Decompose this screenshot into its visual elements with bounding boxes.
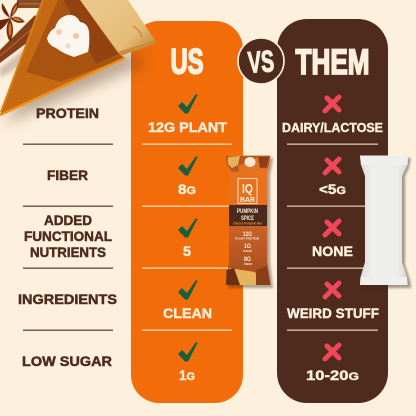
value: <5g: <5G (319, 182, 346, 197)
bar stats (235, 232, 259, 266)
icon: x (325, 345, 339, 359)
bar stats: 12G (243, 232, 252, 238)
badge: vs (238, 38, 284, 84)
illustration: pumpkin pie slice with spices (0, 0, 157, 124)
label: added functional nutrients: NUTRIENTS (30, 244, 106, 260)
heading: them: THEM (296, 43, 370, 82)
bar stats: 1G (244, 244, 251, 250)
flavour band (229, 205, 267, 226)
pie shadow (4, 52, 150, 124)
check marks (178, 94, 198, 362)
value: 5: 5 (183, 244, 192, 259)
x marks (325, 97, 339, 359)
value: dairy/lactose: DAIRY/LACTOSE (282, 121, 383, 135)
flavour band: Classic Pumpkin Bar (233, 222, 263, 226)
icon: check (178, 94, 198, 114)
flavour band: PUMPKIN (237, 208, 258, 215)
product: iq bar pumpkin spice wrapper (226, 156, 273, 288)
pie filling (0, 0, 125, 115)
logo (238, 178, 257, 204)
label: added functional nutrients: ADDED (44, 212, 92, 228)
panel: them column (277, 19, 388, 403)
label: ingredients: INGREDIENTS (18, 291, 117, 307)
icon: x (325, 97, 339, 111)
logo: BAR (240, 197, 255, 204)
icon: star anise (0, 1, 25, 42)
value: clean: CLEAN (163, 306, 212, 321)
value: weird stuff: WEIRD STUFF (287, 306, 379, 321)
icon: x (325, 221, 339, 235)
icon: x (325, 159, 339, 173)
us values (148, 120, 228, 383)
label: added functional nutrients (24, 212, 112, 260)
them values (282, 121, 383, 383)
bar stats: SUGAR (243, 249, 253, 253)
value: 1g: 1G (179, 368, 195, 383)
badge: vs: VS (247, 45, 275, 80)
flavour band: SPICE (241, 215, 254, 222)
label: fiber: FIBER (47, 167, 88, 183)
icon: x (325, 283, 339, 297)
icon: cinnamon sticks (0, 0, 44, 78)
value: 12g plant: 12G PLANT (148, 120, 228, 135)
icon: check (178, 280, 198, 300)
value: 10-20g: 10-20 G (306, 368, 359, 383)
product: plain white competitor wrapper (360, 156, 411, 288)
panel: us column (131, 21, 243, 403)
logo: IQ (242, 181, 253, 196)
label: added functional nutrients: FUNCTIONAL (24, 228, 112, 244)
bar stats: PLANT PROTEIN (235, 236, 259, 240)
value: 8g: 8G (178, 182, 196, 197)
icon: check (178, 342, 198, 362)
icon: check (178, 218, 198, 238)
heading: us: US (170, 42, 204, 82)
row labels (18, 105, 117, 369)
icon: check (178, 156, 198, 176)
value: none: NONE (312, 244, 353, 259)
whipped cream (47, 15, 89, 57)
pie crust (80, 0, 157, 56)
bar stats: FIBER (244, 262, 253, 266)
bar stats: 8G (244, 257, 251, 263)
label: low sugar: LOW SUGAR (22, 353, 112, 369)
label: protein: PROTEIN (36, 105, 99, 121)
